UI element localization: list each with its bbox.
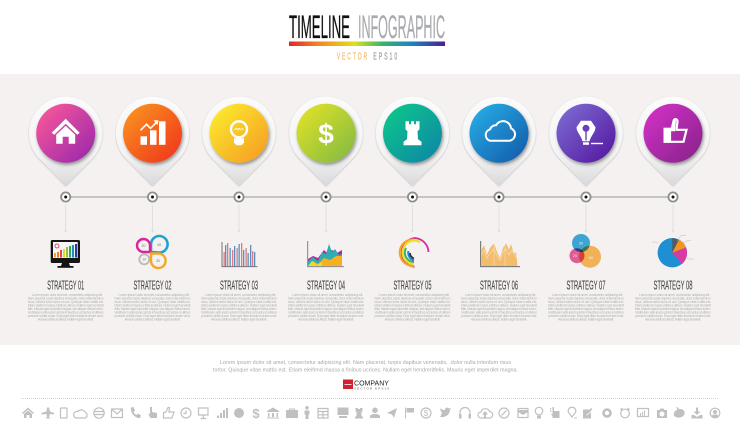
text block 1: [28, 293, 104, 322]
icon row: [22, 406, 720, 421]
icon: dollar text: $: [252, 406, 260, 421]
text block 8: posuere cubilia curae. Duis eget diam tincidunt ornare urna.: [635, 314, 711, 318]
text block 7: [548, 293, 624, 322]
icon: camera: [657, 408, 667, 418]
icon: globe: [94, 408, 104, 418]
icon: download: [692, 408, 702, 418]
text block 1: Aenean a finibus ultrices. Nullam eget hendrerit.: [38, 318, 94, 322]
company logo: COMPANY: [354, 378, 389, 388]
text block 6: [461, 293, 537, 322]
footer text: tortor. Quisque vitae mattis est. Etiam eleifend massa a finibus ucrices. Nullam eget hendreritfelis. Mauris eget imperdiet magna.: [213, 368, 518, 374]
text: STRATEGY 07: [566, 278, 606, 292]
icon: twitter bird: [440, 408, 452, 417]
chart icon 2: number bubbles: [137, 236, 168, 268]
title: TIMELINE: [289, 9, 350, 45]
icon: user badge: [710, 408, 720, 418]
text: INFOGRAPHIC: [358, 9, 445, 45]
text block 2: posuere cubilia curae. Duis eget diam tincidunt ornare urna.: [114, 314, 191, 318]
icon: user: [370, 408, 380, 418]
pin 8: thumbs up: [636, 97, 710, 186]
text block 7: Aenean a finibus ultrices. Nullam eget hendrerit.: [558, 318, 614, 322]
icon: headphones: [459, 408, 471, 418]
chart icon 5: radial rainbow: [400, 238, 428, 267]
text: STRATEGY 02: [134, 278, 172, 292]
dotted divider: [21, 398, 719, 400]
text block 2: Aenean a finibus ultrices. Nullam eget hendrerit.: [124, 318, 181, 322]
icon: rook: [355, 408, 363, 418]
chart icon 7: venn circles: 30: [579, 240, 584, 246]
text block 4: Nam placerat, turpis dapibus venenatis, dolor nulla interdum: [288, 296, 364, 300]
text block 4: Aenean a finibus ultrices. Nullam eget hendrerit.: [298, 318, 354, 322]
text block 1: Lorem ipsum dolor sit amet, consectetur adipiscing elit.: [32, 293, 103, 297]
icon: person: [304, 406, 310, 419]
icon: cloud upload: [478, 409, 493, 418]
icon: compass: [499, 408, 509, 418]
text block 7: felis. Mauris eget imperdiet magna, sed aliquet metus lorem.: [548, 307, 624, 311]
icon: location: [568, 407, 577, 418]
chart icon 8: pie chart: [652, 236, 694, 267]
text block 6: Etiam eleifend massa a finibus ultrices. Nullam eget hendrerit: [461, 304, 537, 308]
company logo: VECTOR EPS10: [354, 386, 389, 390]
icon: paper plane: [387, 408, 397, 418]
pin 7: pen nib: [549, 97, 623, 186]
icon: clock: [181, 408, 191, 418]
text: STRATEGY 05: [394, 278, 432, 292]
text: STRATEGY 01: [47, 278, 84, 292]
pin 4: dollar: $: [318, 118, 334, 149]
icon: bank: [267, 408, 279, 418]
text block 2: felis. Mauris eget imperdiet magna, sed aliquet metus lorem.: [114, 307, 191, 311]
subtitle: VECTOR: [337, 51, 369, 62]
text block 1: posuere cubilia curae. Duis eget diam tincidunt ornare urna.: [28, 314, 104, 318]
text block 5: Lorem ipsum dolor sit amet, consectetur adipiscing elit.: [378, 293, 450, 297]
text block 8: Aenean a finibus ultrices. Nullam eget hendrerit.: [645, 318, 701, 322]
text block 4: Vestibulum ante ipsum primis in faucibus orci luctus et ultrices: [288, 310, 364, 314]
text block 4: felis. Mauris eget imperdiet magna, sed aliquet metus lorem.: [288, 307, 364, 311]
text block 3: Lorem ipsum dolor sit amet, consectetur adipiscing elit.: [205, 293, 276, 297]
pin 5: chess rook: [376, 97, 449, 186]
icon: gear: [604, 410, 610, 416]
text block 3: Vestibulum ante ipsum primis in faucibus orci luctus et ultrices: [201, 310, 277, 314]
text block 5: posuere cubilia curae. Duis eget diam tincidunt ornare urna.: [374, 314, 451, 318]
text block 7: Vestibulum ante ipsum primis in faucibus orci luctus et ultrices: [548, 310, 624, 314]
icon: hand tap: [550, 407, 560, 418]
text block 8: Lorem ipsum dolor sit amet, consectetur adipiscing elit.: [639, 293, 710, 297]
text block 5: Aenean a finibus ultrices. Nullam eget hendrerit.: [384, 318, 441, 322]
icon: image frame: [518, 408, 528, 418]
icon: monitor: [198, 408, 208, 418]
icon: mail: [112, 409, 122, 418]
icon: alarm clock: [620, 408, 630, 418]
pin 1: home: [29, 97, 102, 186]
text block 6: Lorem ipsum dolor sit amet, consectetur adipiscing elit.: [465, 293, 536, 297]
text block 5: risus, ultrices tortor lacus et orci. Quisque vitae mattis est.: [374, 300, 451, 304]
text block 2: Vestibulum ante ipsum primis in faucibus orci luctus et ultrices: [114, 310, 191, 314]
text block 8: Vestibulum ante ipsum primis in faucibus orci luctus et ultrices: [635, 310, 711, 314]
icon: bars: [217, 408, 228, 418]
text block 3: risus, ultrices tortor lacus et orci. Quisque vitae mattis est.: [201, 300, 277, 304]
chart icon 7: venn circles: 60: [589, 255, 594, 260]
chart icon 1: monitor: [51, 240, 80, 268]
icon: briefcase: [286, 408, 298, 418]
text block 1: risus, ultrices tortor lacus et orci. Quisque vitae mattis est.: [28, 300, 104, 304]
footer text: Lorem ipsum dolor sit amet, consectetur adipiscing elit. Nam placerat, turpis dapibus venenatis, .dolor nulla interdum risus: [220, 360, 511, 366]
text block 5: Vestibulum ante ipsum primis in faucibus orci luctus et ultrices: [374, 310, 451, 314]
icon: cloud outline: [74, 410, 87, 418]
text block 2: Nam placerat, turpis dapibus venenatis, dolor nulla interdum: [114, 296, 191, 300]
icon: tablet: [60, 408, 67, 418]
text block 2: Lorem ipsum dolor sit amet, consectetur adipiscing elit.: [118, 293, 190, 297]
text block 1: felis. Mauris eget imperdiet magna, sed aliquet metus lorem.: [28, 307, 104, 311]
text block 8: [635, 293, 711, 322]
icon: coin: [421, 408, 431, 418]
footer text: [213, 360, 518, 374]
pin 2: growth chart: [116, 97, 189, 186]
text block 3: Aenean a finibus ultrices. Nullam eget hendrerit.: [211, 318, 267, 322]
text block 6: posuere cubilia curae. Duis eget diam tincidunt ornare urna.: [461, 314, 537, 318]
icon: pie: [234, 408, 244, 418]
icon: flag: [405, 408, 414, 418]
text block 1: Etiam eleifend massa a finibus ultrices. Nullam eget hendrerit: [28, 304, 104, 308]
text block 6: Vestibulum ante ipsum primis in faucibus orci luctus et ultrices: [461, 310, 537, 314]
text: STRATEGY 04: [307, 278, 345, 292]
text block 7: Etiam eleifend massa a finibus ultrices. Nullam eget hendrerit: [548, 304, 624, 308]
text block 7: posuere cubilia curae. Duis eget diam tincidunt ornare urna.: [548, 314, 624, 318]
text block 8: felis. Mauris eget imperdiet magna, sed aliquet metus lorem.: [635, 307, 711, 311]
icon: calendar: [318, 408, 328, 418]
text block 6: risus, ultrices tortor lacus et orci. Quisque vitae mattis est.: [461, 300, 537, 304]
icon: plane: [42, 408, 54, 418]
text block 6: felis. Mauris eget imperdiet magna, sed aliquet metus lorem.: [461, 307, 537, 311]
text block 5: Nam placerat, turpis dapibus venenatis, dolor nulla interdum: [374, 296, 451, 300]
text block 6: Aenean a finibus ultrices. Nullam eget hendrerit.: [471, 318, 527, 322]
text block 7: Lorem ipsum dolor sit amet, consectetur adipiscing elit.: [552, 293, 623, 297]
chart icon 2: number bubbles: 20: [142, 244, 146, 248]
icon: touch hand: [148, 407, 157, 418]
text block 7: risus, ultrices tortor lacus et orci. Quisque vitae mattis est.: [548, 300, 624, 304]
pin 3: light bulb: [202, 97, 276, 186]
text block 3: posuere cubilia curae. Duis eget diam tincidunt ornare urna.: [201, 314, 277, 318]
main panel: [0, 74, 740, 345]
text block 2: risus, ultrices tortor lacus et orci. Quisque vitae mattis est.: [114, 300, 191, 304]
icon: phone: [131, 407, 141, 418]
chart icon 4: area chart: [308, 241, 344, 267]
icon: banknote: [338, 408, 348, 418]
icon: leaf fruit: [674, 407, 685, 418]
drop lines: [64, 205, 674, 232]
chart icon 7: venn circles: [570, 234, 601, 268]
chart icon 3: bar chart: [222, 242, 258, 267]
pin 6: cloud: [462, 97, 536, 186]
text block 4: [288, 293, 364, 322]
icon: coin: $: [424, 409, 429, 418]
text block 5: [374, 293, 451, 322]
subtitle: EPS10: [373, 51, 399, 62]
text block 4: Lorem ipsum dolor sit amet, consectetur adipiscing elit.: [292, 293, 363, 297]
chart icon 6: orange area chart: [481, 241, 520, 267]
text block 8: Etiam eleifend massa a finibus ultrices. Nullam eget hendrerit: [635, 304, 711, 308]
text block 5: felis. Mauris eget imperdiet magna, sed aliquet metus lorem.: [374, 307, 451, 311]
icon: presentation: [638, 408, 648, 416]
icon: note edit: [583, 408, 592, 418]
chart icon 7: venn circles: 20: [573, 253, 578, 258]
text block 3: [201, 293, 277, 322]
icon: thumbs up: [164, 408, 174, 418]
text block 7: Nam placerat, turpis dapibus venenatis, dolor nulla interdum: [548, 296, 624, 300]
text: STRATEGY 08: [654, 278, 693, 292]
text block 8: risus, ultrices tortor lacus et orci. Quisque vitae mattis est.: [635, 300, 711, 304]
text block 2: Etiam eleifend massa a finibus ultrices. Nullam eget hendrerit: [114, 304, 191, 308]
chart icon 2: number bubbles: 40: [157, 243, 161, 247]
text block 8: Nam placerat, turpis dapibus venenatis, dolor nulla interdum: [635, 296, 711, 300]
text block 4: Etiam eleifend massa a finibus ultrices. Nullam eget hendrerit: [288, 304, 364, 308]
text block 4: posuere cubilia curae. Duis eget diam tincidunt ornare urna.: [288, 314, 364, 318]
text block 3: Etiam eleifend massa a finibus ultrices. Nullam eget hendrerit: [201, 304, 277, 308]
rainbow bar: [289, 42, 445, 46]
company logo: [343, 378, 389, 390]
text block 3: Nam placerat, turpis dapibus venenatis, dolor nulla interdum: [201, 296, 277, 300]
text block 6: Nam placerat, turpis dapibus venenatis, dolor nulla interdum: [461, 296, 537, 300]
text block 2: [114, 293, 191, 322]
chart icon 2: number bubbles: 30: [156, 259, 160, 263]
text block 5: Etiam eleifend massa a finibus ultrices. Nullam eget hendrerit: [374, 304, 451, 308]
timeline line: [66, 196, 673, 198]
icon: bulb: [535, 407, 543, 418]
icon: home: [22, 408, 34, 418]
text: STRATEGY 03: [220, 278, 258, 292]
text block 1: Nam placerat, turpis dapibus venenatis, dolor nulla interdum: [28, 296, 104, 300]
text block 3: felis. Mauris eget imperdiet magna, sed aliquet metus lorem.: [201, 307, 277, 311]
text: STRATEGY 06: [480, 278, 518, 292]
text block 1: Vestibulum ante ipsum primis in faucibus orci luctus et ultrices: [28, 310, 104, 314]
timeline nodes: [61, 192, 678, 202]
chart icon 2: number bubbles: 10: [142, 258, 146, 262]
pin 4: dollar: [289, 97, 363, 186]
subtitle: [337, 51, 399, 62]
text block 4: risus, ultrices tortor lacus et orci. Quisque vitae mattis est.: [288, 300, 364, 304]
